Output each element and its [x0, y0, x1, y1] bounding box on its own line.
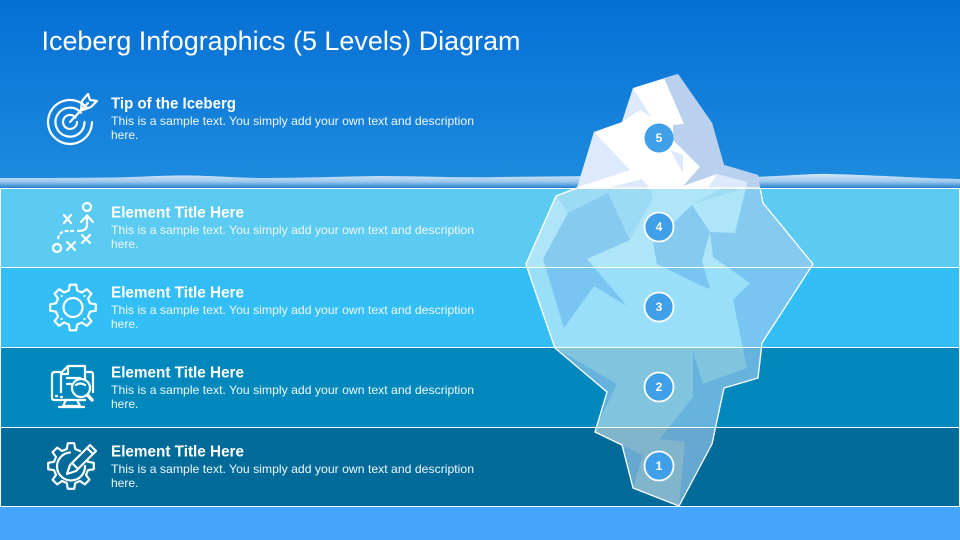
- horizon waves: [0, 174, 960, 188]
- text: element 3: here.: [111, 317, 138, 331]
- title: Iceberg Infographics (5 Levels) Diagram: [42, 26, 520, 56]
- level marker 2: [644, 372, 674, 402]
- text: element 3: Element Title Here: [111, 284, 244, 302]
- level marker 1: [644, 452, 674, 480]
- text: element 3: [111, 284, 474, 331]
- level marker 4: [644, 212, 674, 242]
- band 2: [0, 348, 960, 428]
- iceberg body under water: [526, 188, 813, 506]
- band 1: [0, 428, 960, 506]
- bottom water strip: [0, 506, 960, 540]
- icon: gear: [50, 285, 96, 330]
- level marker 1: 1: [656, 459, 663, 473]
- text: element 2: This is a sample text. You simply add your own text and description: [111, 383, 474, 397]
- text: tip of the iceberg: here.: [111, 128, 138, 142]
- level marker 5: 5: [656, 131, 663, 145]
- text: tip of the iceberg: [111, 96, 474, 142]
- text: element 2: [111, 364, 474, 411]
- text: element 1: This is a sample text. You simply add your own text and description: [111, 462, 474, 476]
- icon: gear with pencil: [48, 443, 96, 489]
- level marker 5: [644, 124, 674, 152]
- band 3: [0, 268, 960, 348]
- level marker 2: 2: [656, 380, 663, 394]
- icon: strategy play: [53, 203, 93, 252]
- icon: monitor with document and magnifier: [52, 366, 93, 407]
- sky background: [0, 0, 960, 188]
- level marker 3: [644, 292, 674, 322]
- text: element 3: This is a sample text. You simply add your own text and description: [111, 303, 474, 317]
- text: tip of the iceberg: This is a sample text. You simply add your own text and description: [111, 114, 474, 128]
- band 4: [0, 188, 960, 268]
- text: element 4: here.: [111, 237, 138, 251]
- iceberg: [526, 74, 813, 506]
- level marker 3: 3: [656, 300, 663, 314]
- text: element 2: Element Title Here: [111, 364, 244, 382]
- icon: target with arrow: [48, 94, 97, 144]
- level marker 4: 4: [656, 220, 663, 234]
- text: element 4: Element Title Here: [111, 204, 244, 222]
- text: element 4: [111, 204, 474, 251]
- re-drawn band dividers over iceberg: [0, 188, 960, 506]
- text: tip of the iceberg: Tip of the Iceberg: [111, 96, 236, 112]
- text: element 2: here.: [111, 397, 138, 411]
- iceberg tip above water: [577, 74, 760, 188]
- text: element 1: here.: [111, 476, 138, 490]
- text: element 4: This is a sample text. You simply add your own text and description: [111, 223, 474, 237]
- text: element 1: Element Title Here: [111, 444, 244, 460]
- text: element 1: [111, 444, 474, 490]
